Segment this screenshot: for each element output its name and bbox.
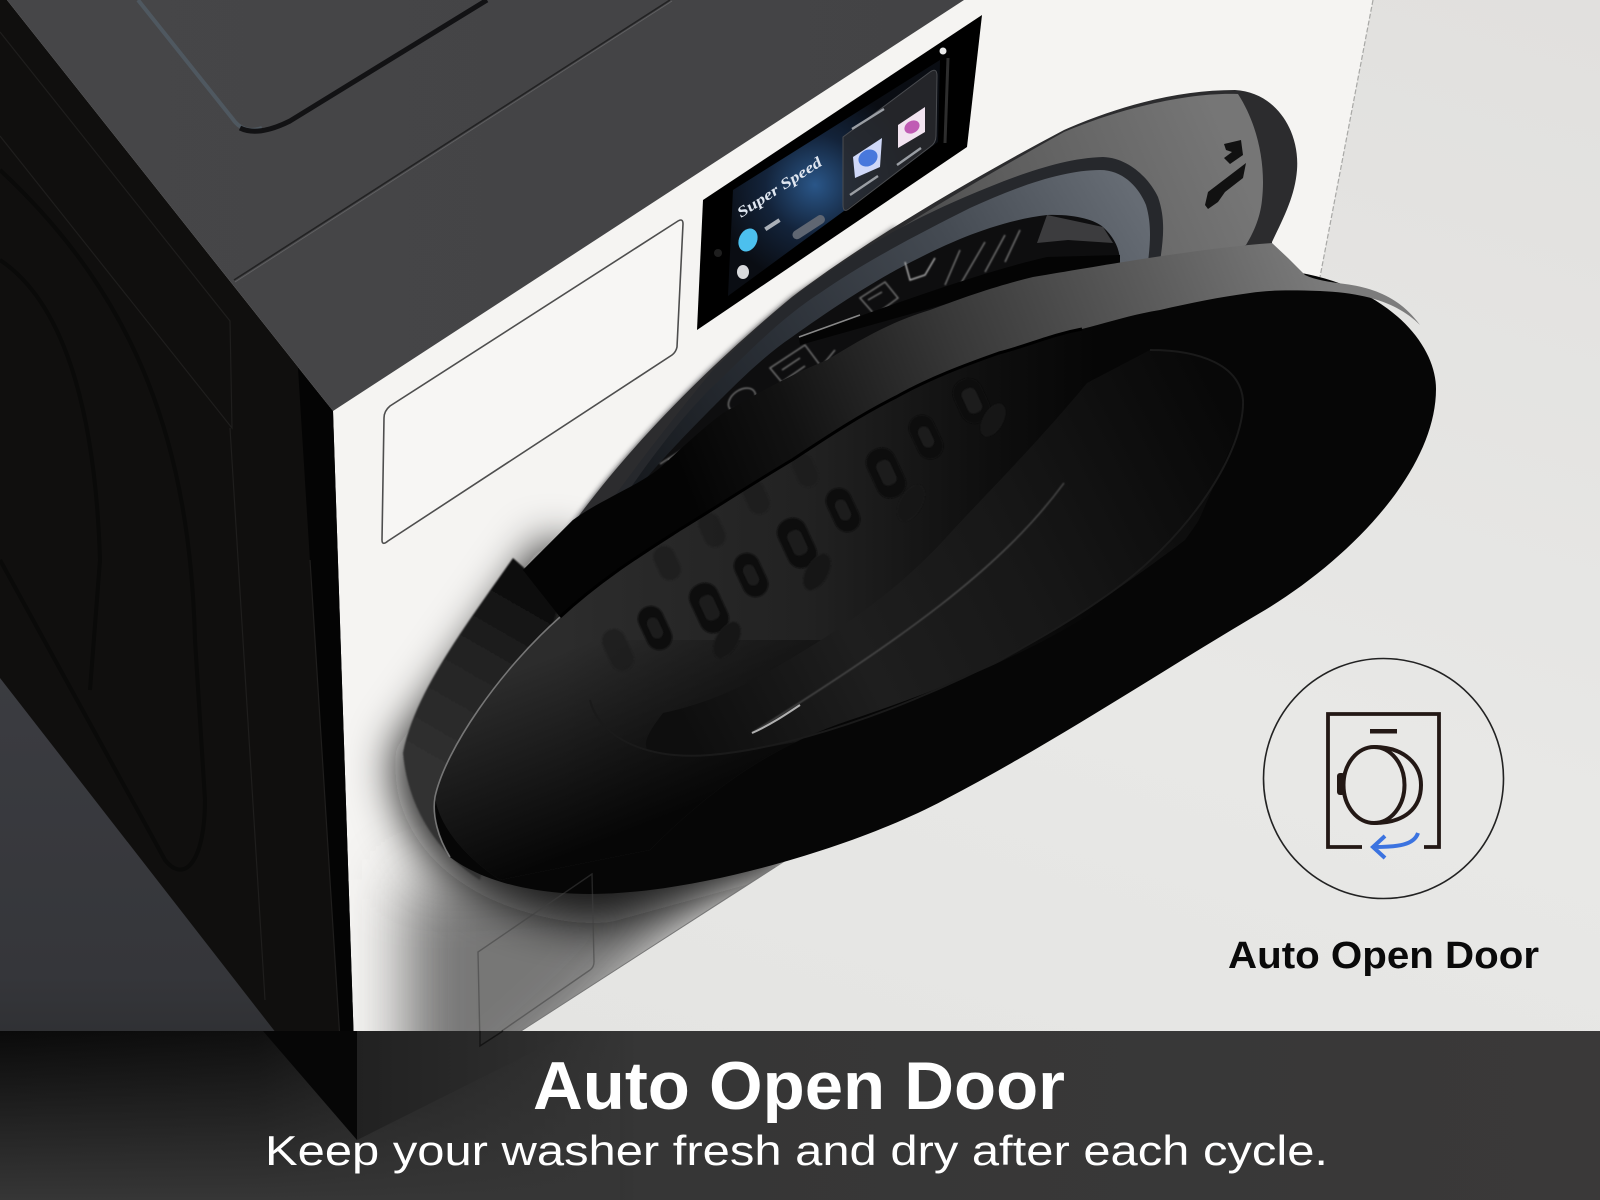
display card [843,70,937,210]
washer side panel [0,0,357,1137]
display screen [728,60,940,296]
icon arrow [1373,833,1418,858]
band lower fade [0,1031,620,1200]
drum grey wall [1037,215,1113,243]
side corner strip [298,368,357,1137]
label outline panel lower [478,874,594,1046]
glass bright glint [752,705,800,733]
camera dot [714,249,722,257]
washer door [403,243,1436,900]
drum slot row [688,582,730,634]
lower panel outline seen through band [480,1031,503,1046]
drum box two [770,345,820,392]
slot rollers [645,386,984,641]
feature icon [1264,658,1504,898]
glass rim ring [590,350,1243,756]
inner lower fade [436,640,820,880]
light plate face [700,94,1263,480]
subtitle: Keep your washer fresh and dry after each cycle. [265,1127,1328,1174]
door shadow on front panel [395,540,800,1130]
door top band [523,243,1420,617]
blue card icon [853,138,882,178]
icon display bar [1370,729,1397,734]
icon door circle [1344,747,1404,823]
display time text [764,218,781,231]
front panel bottom edge seen through band [357,1031,575,1140]
latch slot [1205,163,1246,209]
plate soft shadow edge [548,227,900,560]
icon washer frame [1328,714,1439,847]
drum box one [860,282,898,315]
display pill button [791,213,827,241]
icon circle [1264,658,1504,898]
plate dark outer [548,90,1297,600]
door back rim [403,558,560,880]
glass highlight [752,483,1064,733]
top recess outline [138,0,262,130]
washer front panel [333,0,1373,1137]
scroll bar [945,58,948,143]
gasket outer ring [590,157,1163,530]
main title: Auto Open Door [533,1048,1065,1124]
slot shadows [714,404,1005,647]
lower left drum streaks [660,445,700,490]
front bottom edge [357,867,775,1137]
lighter glass band [654,380,1183,746]
door edge highlight [434,617,560,857]
wedge highlight [799,315,860,337]
side embossed shape [0,170,205,870]
latch mark [1224,140,1243,164]
drum lifter ring [724,383,760,417]
reflected drum slots [637,392,955,650]
brightness dot [940,48,946,54]
display heading: Super Speed [734,154,826,221]
display white button [737,265,749,279]
icon drum arc [1374,747,1421,823]
washer corner seen through band [263,1031,357,1140]
top surface seam [234,0,670,280]
right edge seam [1320,0,1373,277]
drum interior details [660,230,1020,470]
label outline panel upper [382,220,683,543]
drum opening [630,215,1120,520]
door black face [434,270,1436,894]
pink card icon [898,107,925,148]
caption band [0,1031,1600,1200]
gasket ring [596,170,1150,540]
latch hook on plate [1205,140,1246,209]
display cyan button [735,225,761,255]
door hinge plate [548,90,1297,600]
control display [697,15,982,330]
drum bright fitting [905,258,935,280]
washer top surface [7,0,964,411]
faint drum slots [602,547,679,652]
icon door handle [1337,773,1345,795]
dark floor shadow at left [0,670,357,1140]
side seam lines [0,32,345,1120]
door inner glass [436,358,1183,880]
card captions [850,109,921,195]
glass top edge [560,329,1082,617]
drum bright wedge [799,255,1120,345]
icon label: Auto Open Door [1228,935,1539,977]
